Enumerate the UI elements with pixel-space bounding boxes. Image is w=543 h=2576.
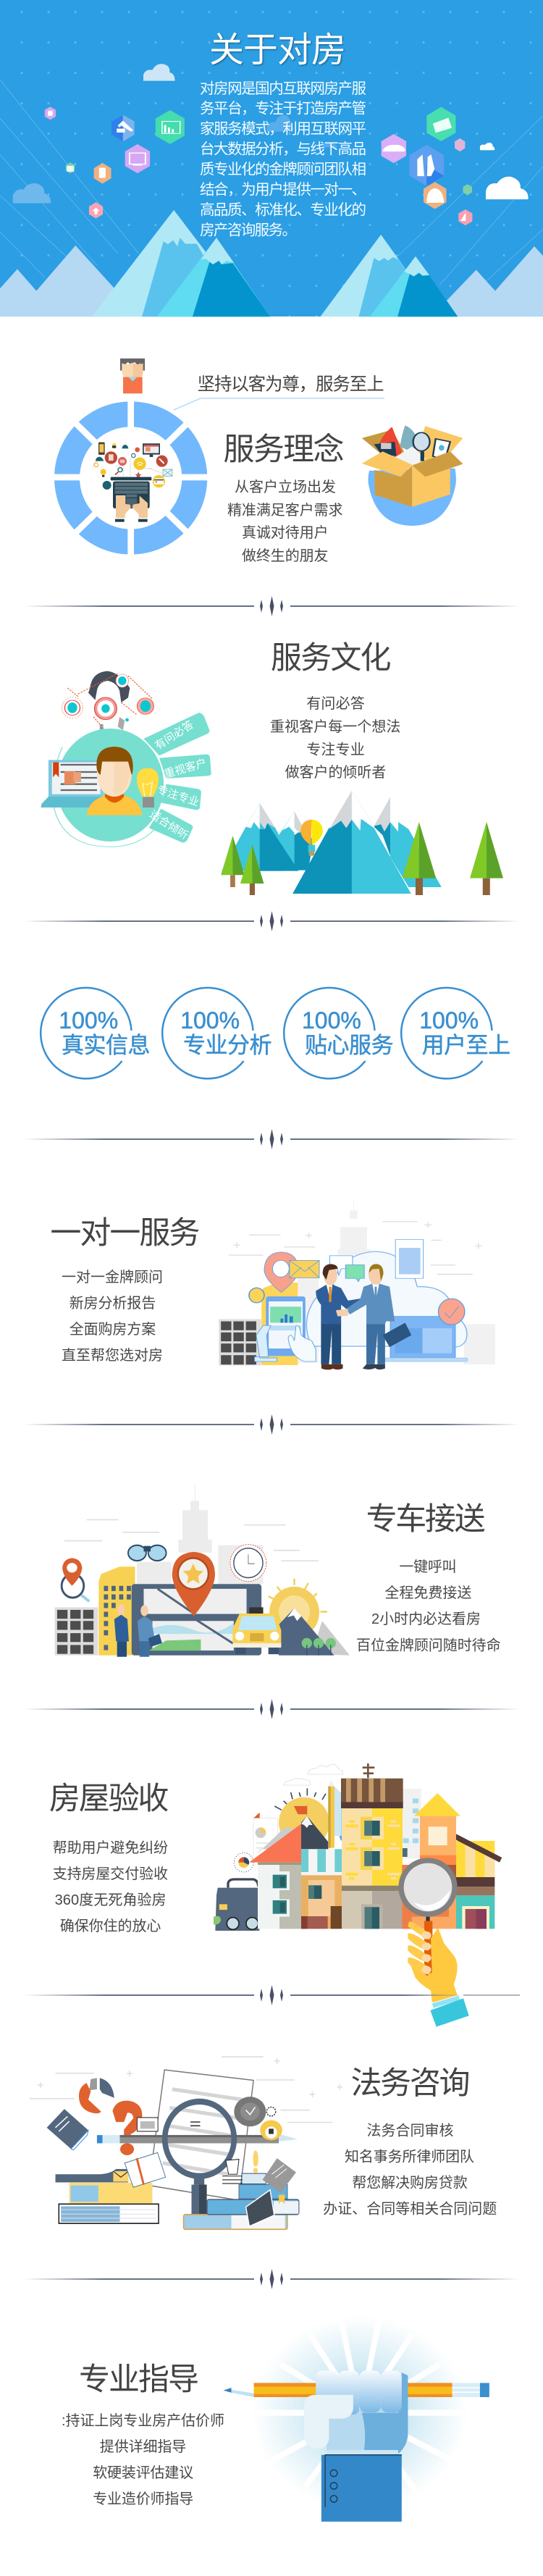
hero background: [0, 0, 543, 316]
orange shop: [301, 1849, 342, 1929]
hero description: 高品质、标准化、专业化的: [200, 201, 366, 219]
panel: 100% badges: [41, 988, 510, 1078]
badge: 专业分析: [162, 988, 272, 1078]
panel: one-to-one service: [50, 1201, 495, 1369]
text list: 法务合同审核: [366, 2122, 453, 2139]
hero description: 家服务模式，利用互联网平: [200, 120, 366, 138]
divider: [24, 1699, 520, 1719]
heading: one-to-one service: 一对一服务: [50, 1216, 200, 1251]
text list: 办证、合同等相关合同问题: [323, 2200, 497, 2218]
blade labels: 专注专业: [156, 784, 201, 809]
text list: 360度无死角验房: [55, 1892, 167, 1908]
hero icons: right hexagons: [382, 107, 472, 225]
binoculars: [128, 1545, 167, 1561]
illustration: map and taxi: [55, 1484, 350, 1657]
hero description: [200, 80, 366, 239]
skyline: [64, 1484, 319, 1584]
briefcase: [214, 1879, 259, 1931]
laptop: [49, 760, 102, 798]
text list: 直至帮您选对房: [62, 1347, 163, 1364]
badge: 真实信息: 100%: [59, 1007, 118, 1033]
hero mountains: [0, 210, 543, 316]
pointing hand: [288, 1325, 316, 1362]
motto text: 坚持以客为尊，服务至上: [198, 374, 384, 394]
text list: 全面购房方案: [70, 1321, 156, 1338]
service ring: [53, 398, 210, 558]
dark building: [219, 1319, 261, 1365]
heading: car pick-up: 专车接送: [366, 1502, 486, 1537]
clock: [230, 1545, 266, 1582]
hero clouds: [13, 64, 529, 204]
hero description: 房产咨询服务。: [200, 222, 297, 239]
illustration: houses and magnifier: [214, 1763, 502, 2027]
map pin: [264, 1252, 298, 1292]
text list: [62, 1269, 163, 1364]
heading: service culture: 服务文化: [271, 641, 391, 676]
text list: 有问必答: [306, 695, 365, 712]
text list: 软硬装评估建议: [93, 2464, 193, 2481]
illustration: handshake: [219, 1201, 495, 1369]
panel: professional guidance: [62, 2316, 489, 2522]
report: [253, 1813, 277, 1859]
hand: [408, 1921, 469, 2027]
hero description: 对房网是国内互联网房产服: [200, 80, 366, 97]
text list: 帮助用户避免纠纷: [53, 1839, 168, 1856]
yellow tower: [261, 1283, 298, 1365]
text list: 精准满足客户需求: [227, 502, 343, 519]
badge: 专业分析: 100%: [180, 1007, 240, 1033]
text list: [62, 2412, 224, 2507]
center laptop and icons: [93, 442, 172, 522]
blade labels: 适合倾听: [147, 808, 190, 842]
illustration: hand holding pencil: [224, 2316, 489, 2522]
text list: 做终生的朋友: [242, 547, 329, 564]
text list: 提供详细指导: [100, 2438, 186, 2455]
badge: 真实信息: [41, 988, 150, 1078]
heading: house inspection: 房屋验收: [49, 1782, 169, 1816]
badge: 用户至上: 100%: [419, 1007, 479, 1033]
envelope: [290, 1260, 319, 1277]
big magnifier: [165, 2102, 234, 2228]
hero description: 质专业化的金牌顾问团队相: [200, 161, 366, 178]
pencil: [224, 2383, 489, 2397]
text list: [53, 1839, 168, 1934]
text list: 从客户立场出发: [235, 479, 336, 495]
calendar: [137, 2118, 158, 2131]
text list: 2小时内必达看房: [371, 1611, 481, 1627]
illustration: person and ring: [53, 358, 210, 558]
big pencil: [119, 2135, 279, 2143]
sky details: [284, 1764, 421, 1859]
pie badge: [234, 1853, 253, 1872]
panel: service philosophy: [53, 358, 463, 564]
badge: 贴心服务: 贴心服务: [305, 1033, 394, 1058]
tablet: [266, 1296, 306, 1356]
glow rays: [253, 2316, 468, 2509]
text list: [323, 2122, 497, 2218]
divider: [24, 1414, 520, 1435]
striped house: [456, 1834, 502, 1929]
illustration: open box: [362, 425, 463, 526]
pie: [89, 2078, 97, 2090]
yellow building: [98, 1566, 135, 1656]
skyline: [229, 1201, 495, 1364]
tall yellow house: [341, 1763, 403, 1929]
sun and mountain: [269, 1579, 350, 1656]
text list: 专注专业: [306, 742, 365, 758]
text list: 重视客户每一个想法: [270, 718, 400, 735]
badge: 专业分析: 专业分析: [183, 1033, 272, 1058]
hero title: 关于对房: [209, 31, 346, 70]
text list: [270, 695, 400, 781]
bubbles: [329, 1256, 353, 1275]
dark building: [55, 1607, 98, 1656]
heading: service philosophy: 服务理念: [223, 432, 345, 467]
divider: [24, 2269, 520, 2289]
badge: 真实信息: 真实信息: [62, 1033, 151, 1058]
sun: [270, 1788, 329, 1848]
text list: :持证上岗专业房产估价师: [62, 2412, 224, 2429]
blade labels: 重视客户: [163, 757, 208, 781]
text list: [356, 1558, 501, 1654]
businessman 1: [316, 1264, 360, 1369]
hero description: 务平台，专注于打造房产管: [200, 100, 366, 117]
text list: 全程免费接送: [384, 1585, 471, 1601]
fist: [304, 2370, 408, 2456]
text list: [227, 479, 343, 564]
map pin star: [172, 1552, 215, 1616]
icon: person: [120, 358, 145, 393]
mountain and pencil: [257, 1780, 342, 1854]
check badge: [439, 1299, 465, 1325]
books right: [183, 2150, 299, 2229]
text list: 确保你住的放心: [60, 1918, 161, 1934]
heading: professional guidance: 专业指导: [79, 2362, 199, 2397]
text list: 新房分析报告: [70, 1295, 156, 1312]
blade labels: [147, 718, 208, 842]
text list: 知名事务所律师团队: [345, 2148, 474, 2165]
text list: 一键呼叫: [400, 1558, 456, 1575]
heading: legal consulting: 法务咨询: [350, 2066, 471, 2101]
businessman 2: [336, 1264, 411, 1369]
gears and targets: [62, 671, 153, 730]
divider: [24, 911, 520, 931]
panel: hero banner: [0, 0, 543, 316]
panel: service culture: [41, 641, 503, 895]
motto leader line: [174, 398, 384, 410]
hero description: 结合，为用户提供一对一、: [200, 181, 366, 198]
badge: 用户至上: 用户至上: [422, 1033, 510, 1058]
sleeve: [321, 2450, 402, 2522]
text list: 专业造价师指导: [93, 2491, 193, 2507]
magnifier pin: [62, 1574, 84, 1598]
white house: [249, 1824, 301, 1929]
document: [149, 2070, 253, 2200]
text list: 做客户的倾听者: [285, 764, 386, 781]
orange tower: [402, 1793, 460, 1929]
panel: house inspection: [49, 1763, 502, 2027]
illustration: books and magnifier: [30, 2057, 342, 2229]
text list: 帮您解决购房贷款: [352, 2174, 468, 2191]
businessmen: [114, 1604, 162, 1657]
text list: 支持房屋交付验收: [53, 1866, 168, 1882]
taxi: [232, 1607, 281, 1654]
hero description: 台大数据分析，与线下高品: [200, 140, 366, 158]
divider: [24, 1985, 520, 2005]
question mark: [112, 2101, 142, 2142]
panel: car pick-up: [55, 1484, 501, 1657]
mint blades and circle: [56, 729, 164, 842]
laptop: [390, 1317, 455, 1357]
text list: 真诚对待用户: [242, 524, 329, 541]
text list: 一对一金牌顾问: [62, 1269, 163, 1285]
hero icons: left hexagons: [45, 106, 185, 219]
illustration: mountains and trees: [221, 791, 503, 895]
illustration: consultant: [41, 671, 211, 847]
divider: [24, 1129, 520, 1149]
background details: [30, 2057, 332, 2123]
text list: 百位金牌顾问随时待命: [356, 1637, 501, 1654]
document: [395, 1240, 423, 1278]
cloud: [306, 1251, 467, 1347]
panel: legal consulting: [30, 2057, 497, 2229]
badge: 贴心服务: 100%: [302, 1007, 361, 1033]
head: [87, 795, 142, 815]
bulb: [137, 768, 159, 797]
divider: [24, 596, 520, 616]
notebook: [47, 2109, 88, 2149]
blade labels: 有问必答: [153, 718, 196, 752]
gears: [234, 2097, 282, 2140]
map screen: [132, 1584, 261, 1656]
magnifier: [398, 1858, 458, 1976]
badge: 贴心服务: [284, 988, 394, 1078]
badge: 用户至上: [401, 988, 510, 1078]
books left: [56, 2152, 166, 2223]
